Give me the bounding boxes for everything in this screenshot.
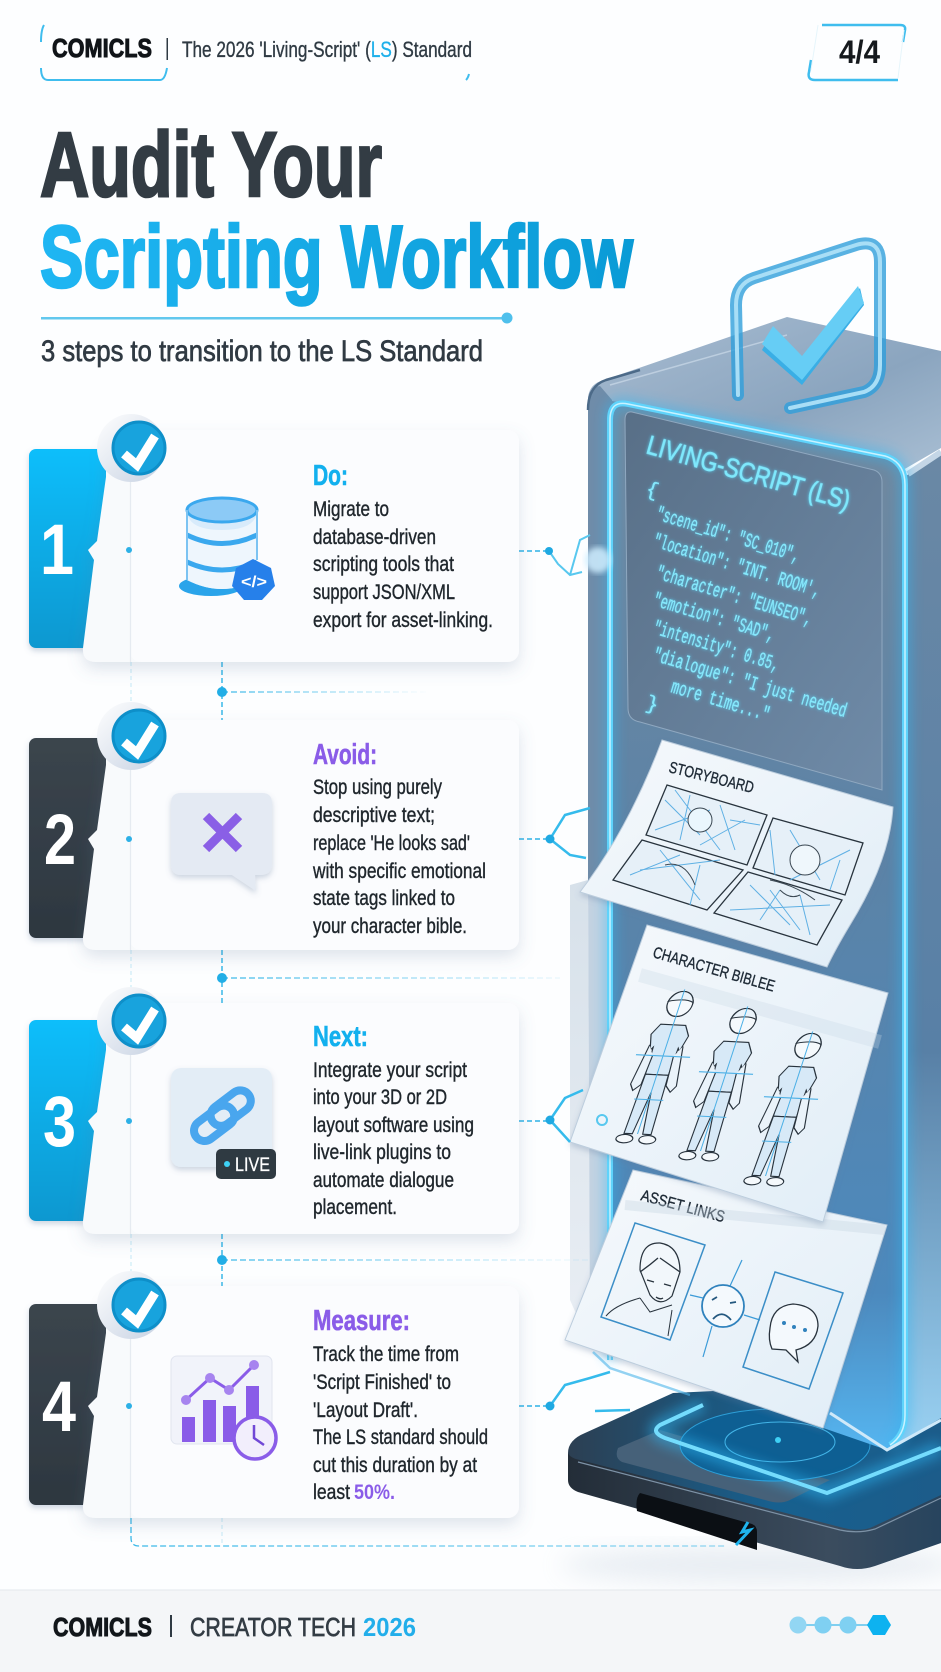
text: do: Do: [313,460,348,492]
title: Scripting Workflow [40,207,633,306]
branch to asset links [519,1372,630,1411]
neon frame [610,403,905,1445]
paper: asset links: ASSET LINKS [639,1187,726,1226]
tower body [570,317,941,1450]
character figures [607,988,840,1187]
branch to character bible [519,1090,583,1142]
number tab 1 [29,449,119,648]
icon: database [179,498,275,600]
number tab 4 [29,1304,119,1505]
text: next: Integrate your script [313,1059,467,1082]
connector 3 to 4 [217,1234,590,1286]
connector 2 to 3 [217,950,560,1003]
text: next: Next: [313,1021,368,1053]
json code: more time..." [668,677,772,728]
text: avoid: your character bible. [313,915,467,938]
icon: chart with clock [171,1356,276,1459]
glass foot and base neon [593,1352,941,1493]
json code: "character": "EUNSEO", [653,563,815,632]
footer text: CREATOR TECH [190,1612,356,1642]
text: measure: 'Script Finished' to [313,1371,451,1394]
text: do: Migrate to [313,498,389,521]
checkmark [762,286,864,385]
text: do: database-driven [313,526,436,549]
icon: chain link [171,1068,276,1179]
header tag [41,25,472,80]
text: avoid: replace 'He looks sad' [313,832,470,855]
speech bubble frame [743,1272,843,1389]
number tab 2 [29,738,119,938]
json code [643,479,849,728]
branch to storyboard [519,808,590,858]
text: next: placement. [313,1196,397,1219]
device base [560,1380,941,1583]
code hexagon: </> [241,574,267,591]
branch to screen [519,535,590,575]
text: avoid: Stop using purely [313,776,442,799]
card 1 [83,430,519,662]
footer: 2026 [363,1612,416,1642]
step number 2: 2 [44,801,76,880]
screen heading: LIVING-SCRIPT (LS) [643,430,854,516]
connector 1 to 2 [217,662,430,720]
number tab 3 [29,1020,119,1221]
card 3 [83,1003,519,1234]
text: avoid [312,739,486,938]
check badge 4 [97,1271,165,1339]
text: next: automate dialogue [313,1169,454,1192]
text: measure: Track the time from [313,1343,459,1366]
check frame [736,243,880,408]
check badge 2 [97,702,165,770]
header subtitle: The 2026 'Living-Script' (LS) Standard [182,37,472,62]
paper: storyboard: STORYBOARD [667,759,756,797]
json code: "intensity": 0.85, [650,618,782,678]
footer [0,1590,941,1672]
step 3 [29,987,519,1234]
text: avoid: descriptive text; [313,804,435,827]
text: do: support JSON/XML [313,581,455,604]
device illustration [560,243,941,1583]
title divider line [41,312,512,324]
json code: } [643,693,661,718]
page number badge: 4/4 [839,34,880,70]
portrait frame [601,1223,705,1340]
text: do [313,460,493,632]
text: measure: The LS standard should [313,1426,488,1449]
icon: speech bubble with cross [171,793,272,891]
subtitle: 3 steps to transition to the LS Standard [41,335,483,368]
text: do: scripting tools that [313,553,454,576]
json code: "scene_id": "SC_010", [653,504,802,569]
json code: "location": "INT. ROOM', [650,531,823,604]
title [40,114,633,306]
card 4 [83,1286,519,1518]
paper: character bible [570,925,888,1222]
step number 4: 4 [42,1368,76,1447]
paper marker [597,1115,607,1125]
text: measure [313,1305,488,1504]
text: next: live-link plugins to [313,1141,451,1164]
paper: character bible: CHARACTER BIBLEE [651,945,777,996]
check badge 1 [97,414,165,482]
code screen [625,412,882,790]
paper: asset links [565,1170,887,1428]
footer brand: COMICLS [53,1612,152,1642]
progress dots [790,1615,891,1635]
left vertical dashes [130,662,132,1286]
text: measure: 50%. [354,1481,395,1504]
text: avoid: state tags linked to [313,887,455,910]
glowing connector node [585,547,611,573]
connectors [131,535,750,1546]
text: next: layout software using [313,1114,474,1137]
step number 3: 3 [43,1083,76,1162]
text: avoid: Avoid: [313,739,377,771]
text: next [313,1021,474,1219]
step 2 [29,702,519,950]
text: avoid: with specific emotional [312,860,486,883]
text: do: export for asset-linking. [313,609,493,632]
brand name: COMICLS [52,33,152,63]
emotion face [690,1260,760,1357]
step number 1: 1 [40,511,74,590]
bottom connector [131,1518,750,1546]
text: measure: 'Layout Draft'. [313,1399,418,1422]
storyboard panels [613,785,863,945]
json code: { [643,479,661,504]
paper: storyboard [580,740,893,967]
step 1 [29,414,519,662]
text: measure: cut this duration by at [313,1454,477,1477]
card 2 [83,720,519,950]
text: measure: Measure: [313,1305,410,1337]
live tag: LIVE [235,1155,270,1176]
page number badge [809,25,905,80]
text: measure: least [313,1481,350,1504]
check badge 3 [97,987,165,1055]
json code: "emotion": "SAD", [650,590,777,648]
text: next: into your 3D or 2D [313,1086,447,1109]
step 4 [29,1271,519,1518]
title: Audit Your [40,114,382,216]
panel sketches [630,790,850,935]
